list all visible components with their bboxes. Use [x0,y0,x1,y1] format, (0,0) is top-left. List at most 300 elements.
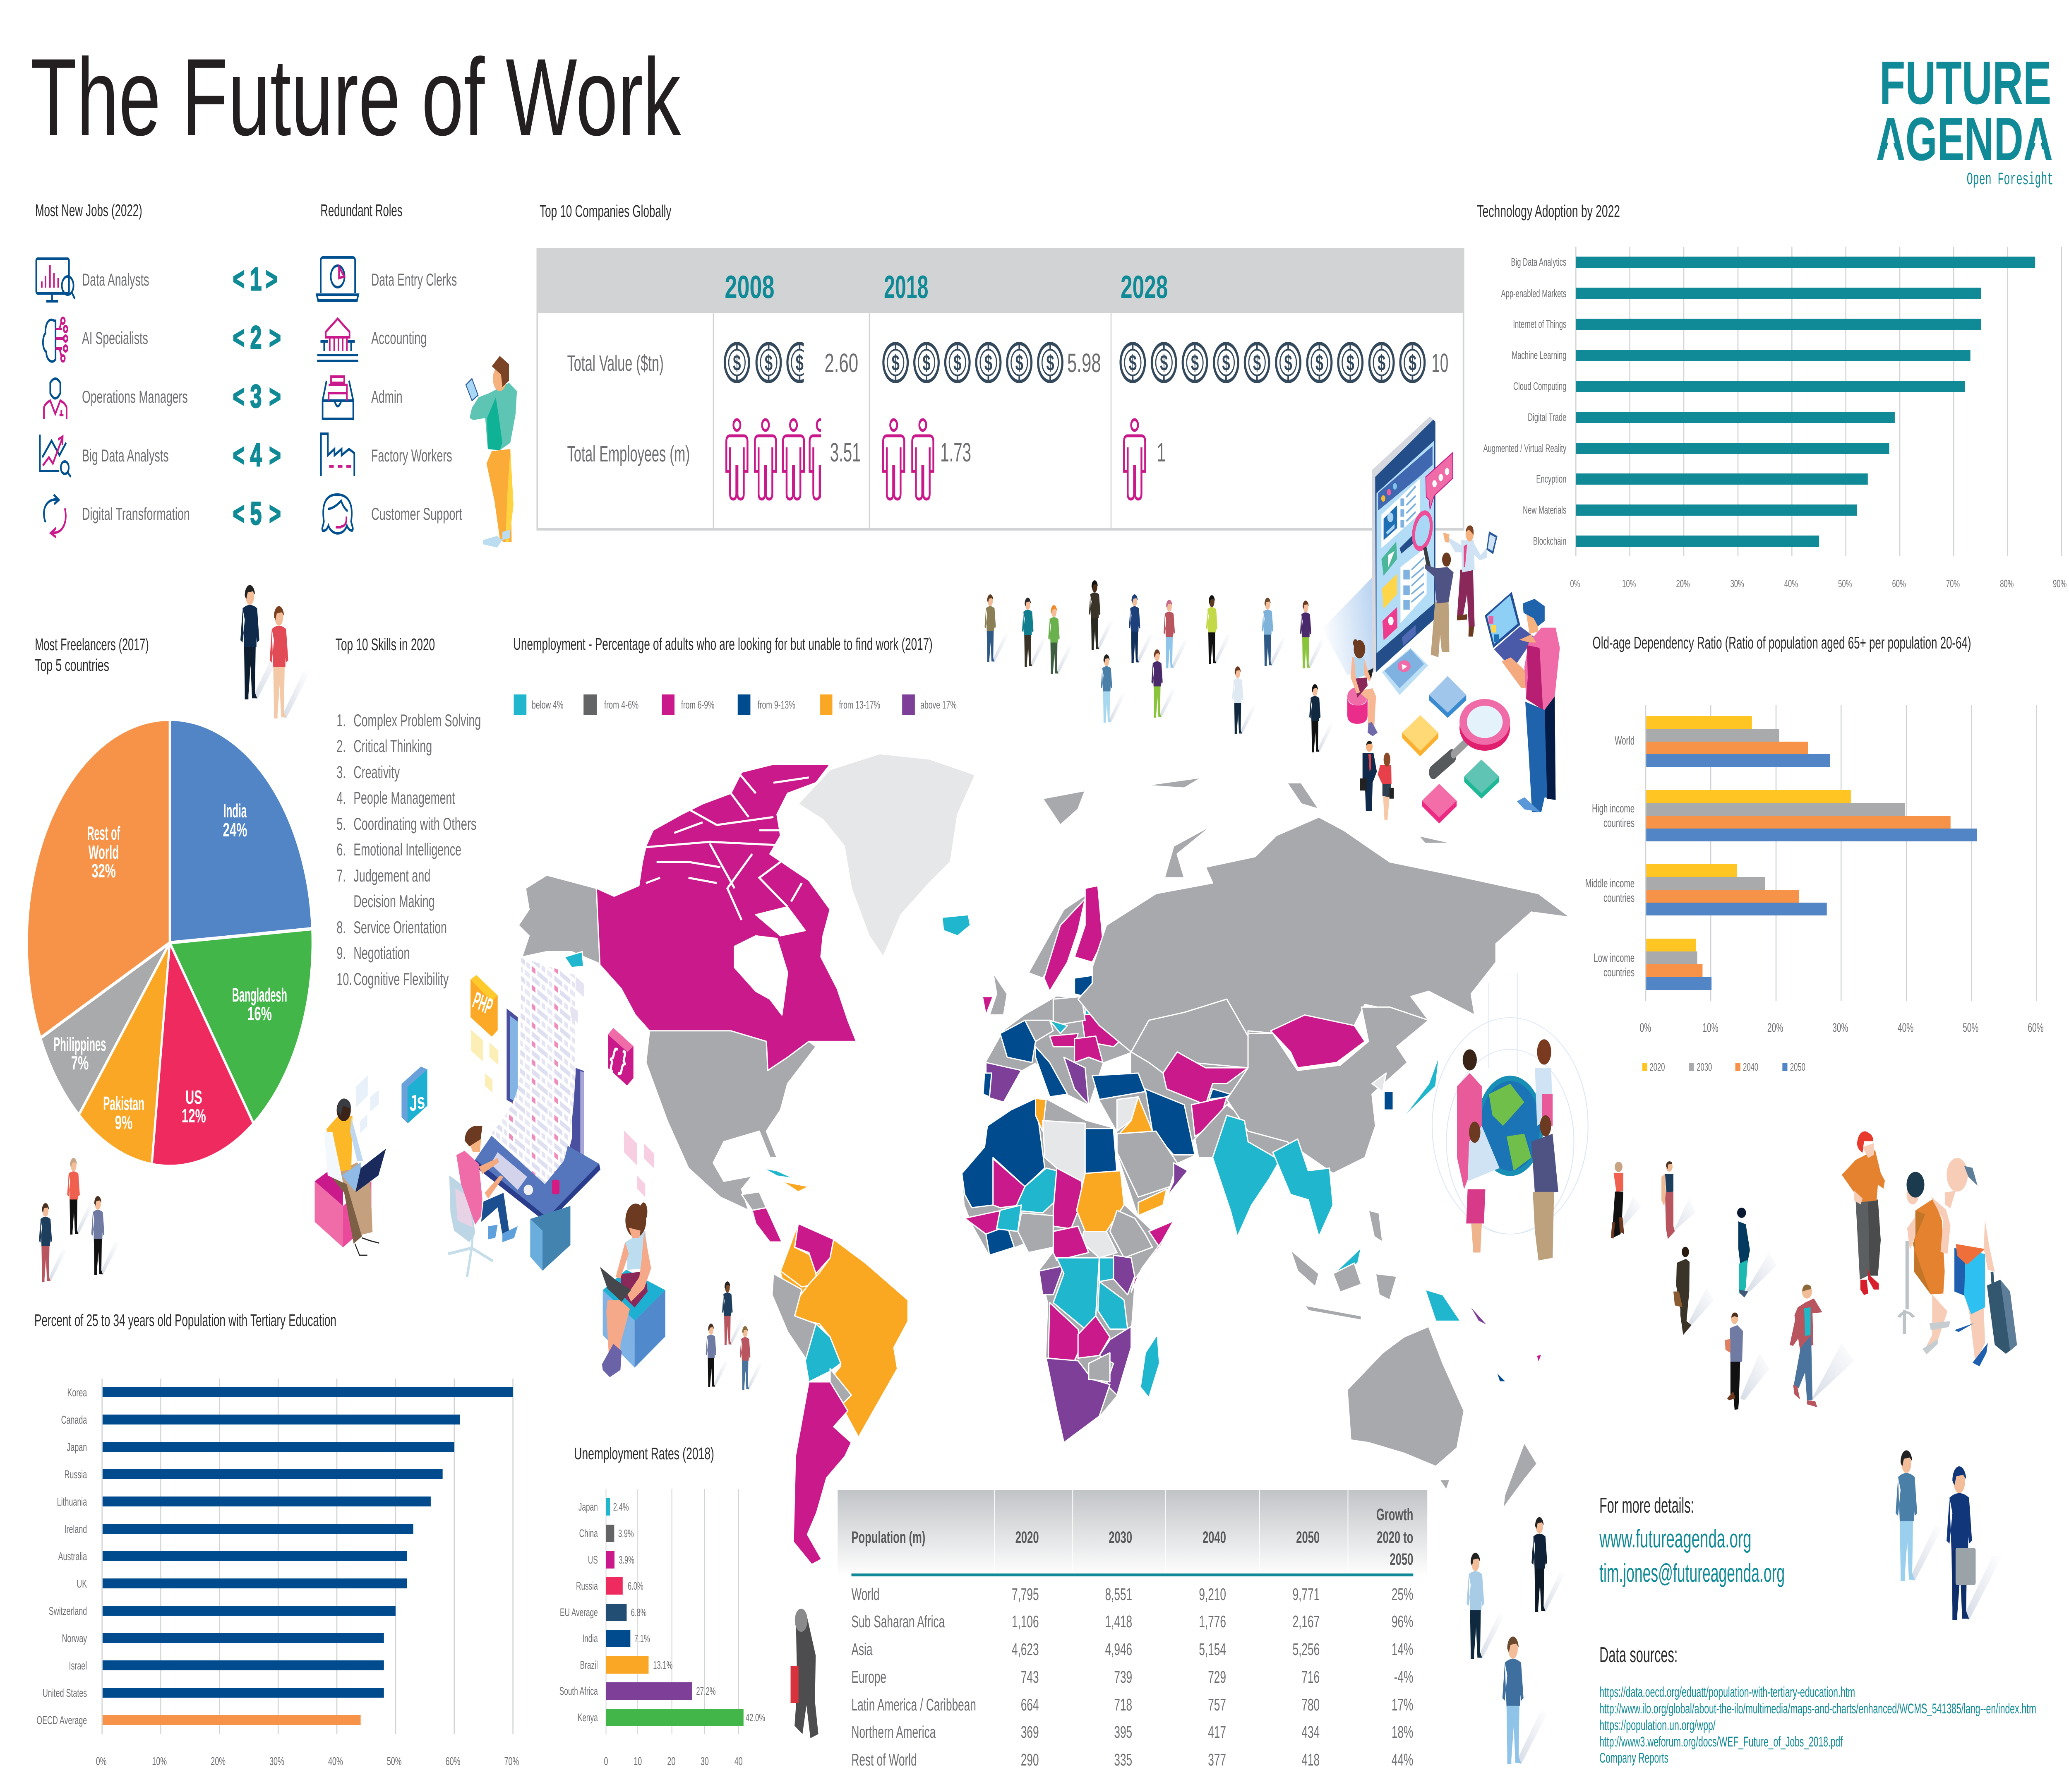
value labels: 3.9% [619,1554,634,1566]
category labels: Middle income [1585,877,1635,890]
category labels: Japan [578,1500,598,1513]
pie labels [53,800,287,1134]
rank column: 5 [250,495,262,531]
heading: Unemployment - Percentage of adults who are looking for but unable to find work (2017) [513,635,933,654]
for more details: For more details: [1599,1494,1694,1518]
category labels [1585,734,1635,979]
legend [514,694,957,715]
panel: contact details and sources [1599,1494,2036,1766]
legend: 2020 [1650,1061,1665,1073]
header text: Growth [1376,1506,1413,1524]
rank column: 1 [250,261,262,297]
header text: 2020 to [1377,1528,1413,1547]
axis labels: 60% [1892,577,1906,590]
illustration: coder, JS and PHP scene: Js [407,1089,427,1117]
table rows: 9,210 [1199,1585,1226,1604]
table rows: 4,946 [1105,1640,1132,1659]
heading: Most Freelancers (2017) [35,635,149,654]
rank column: > [269,320,281,356]
rank column: > [266,261,277,297]
heading: Technology Adoption by 2022 [1477,202,1620,221]
total value coins [725,344,1425,382]
figures: people beside population table [1467,1517,1566,1764]
axis labels: 60% [446,1755,461,1768]
value labels: 27.2% [696,1685,715,1697]
axis labels: 30 [701,1755,709,1768]
skills list: Judgement and [353,866,430,886]
skills list: People Management [353,788,455,808]
skills list: Critical Thinking [353,737,432,756]
table frame [537,249,1464,529]
rank column: < [233,320,245,356]
logo: Future Agenda: FUTURE [1879,49,2051,117]
category labels: Machine Learning [1512,349,1566,361]
category labels: countires [1603,817,1635,830]
panel: unemployment rates 2018 chart [559,1444,765,1768]
legend [1642,1061,1805,1073]
axis labels: 20% [1676,577,1690,590]
table rows: 335 [1114,1751,1132,1770]
year headers [725,269,1168,305]
website and email [1599,1525,1785,1588]
skills list: 5. [336,814,346,834]
axis labels [1640,1021,2044,1035]
table rows: 664 [1021,1696,1039,1715]
axis labels: 80% [2000,577,2014,590]
employee figures [726,420,1145,499]
skills list: 9. [336,944,346,963]
axis labels: 90% [2053,577,2067,590]
rank column: < [233,437,245,473]
table rows: 290 [1021,1751,1039,1770]
bars [606,1498,744,1726]
value labels: 3.9% [618,1527,634,1540]
category labels: UK [77,1577,87,1590]
illustration: app phone scene [1322,416,1560,824]
source links [1599,1684,2036,1766]
pie labels: US [185,1087,202,1108]
category labels: Digital Trade [1528,411,1566,423]
figure: central cluster of small people [984,580,1334,752]
icon: laptop [317,257,358,300]
values: 1 [1157,438,1166,467]
figures: camera woman and pilot [1896,1450,2002,1620]
category labels: Australia [58,1550,87,1563]
category labels: Canada [61,1413,87,1426]
source links: https://population.un.org/wpp/ [1599,1718,1716,1733]
role labels: Factory Workers [371,446,452,466]
axis labels: 50% [387,1755,402,1768]
axis labels [604,1755,743,1768]
axis labels: 10% [1622,577,1636,590]
role labels: Accounting [371,329,427,348]
value labels: 6.0% [628,1580,643,1592]
illustration: coder, JS and PHP scene [314,958,665,1377]
axis labels: 20% [1767,1021,1783,1035]
pie labels: 16% [247,1003,272,1025]
header text: 2050 [1390,1550,1413,1569]
heading: Top 10 Skills in 2020 [336,635,435,654]
rank column: 2 [250,319,262,356]
rank column: < [233,379,245,414]
category labels: Encyption [1536,473,1566,485]
heading [35,635,149,675]
header text: 2050 [1296,1528,1320,1547]
panel: redundant roles [317,201,517,548]
logo: Future Agenda: Open Foresight [1967,170,2053,190]
header text: 2030 [1109,1528,1132,1547]
category labels: countries [1603,966,1635,979]
axis labels: 50% [1838,577,1852,590]
table rows: 369 [1021,1723,1039,1742]
category labels: OECD Average [36,1714,87,1727]
header band [838,1490,1427,1576]
category labels: countries [1603,891,1635,905]
axis labels: 40 [734,1755,743,1768]
data sources heading: Data sources: [1599,1643,1678,1667]
value labels: 13.1% [653,1659,672,1671]
logo: Future Agenda [1876,49,2053,190]
values: 3.51 [830,438,861,467]
rank column: < [233,496,245,531]
table rows: Northern America [852,1723,936,1742]
heading: Unemployment Rates (2018) [574,1444,714,1463]
pie labels: 7% [71,1052,89,1074]
pie labels: 9% [115,1112,132,1134]
header text [852,1506,1413,1569]
role labels [371,270,462,524]
axis labels: 60% [2028,1021,2044,1035]
rank column: 3 [250,378,262,414]
gridlines [1576,247,2062,556]
pie labels: India [223,800,247,822]
table rows: 1,776 [1199,1612,1226,1631]
rank column: 4 [250,437,262,473]
category labels: Big Data Analytics [1511,256,1566,268]
job labels [82,270,190,524]
role labels: Customer Support [371,504,462,524]
skills list: Emotional Intelligence [353,840,461,860]
axis labels: 40% [1784,577,1798,590]
year headers: 2018 [884,269,928,305]
axis labels [1570,577,2067,590]
website and email: tim.jones@futureagenda.org [1599,1559,1785,1588]
logo: Future Agenda: AGENDA [1876,106,2053,173]
skills list: Negotiation [353,944,410,963]
header text: Population (m) [852,1528,925,1547]
source links: https://data.oecd.org/eduatt/population-with-tertiary-education.htm [1599,1684,1855,1700]
axis labels: 40% [328,1755,343,1768]
gridlines [606,1489,739,1734]
skills list: Coordinating with Others [353,814,476,834]
figure: business pair near pie chart [240,585,310,718]
category labels: Augmented / Virtual Reality [1483,442,1566,454]
category labels: Internet of Things [1513,318,1566,330]
rank column: > [269,437,281,473]
table rows: -4% [1394,1668,1413,1687]
category labels: South Africa [559,1684,598,1697]
icon: admin tray [323,377,353,419]
category labels: China [579,1527,598,1540]
skills list: Service Orientation [353,918,447,937]
rank column: < [233,261,245,297]
job labels: Operations Managers [82,387,188,407]
table rows: 716 [1301,1668,1320,1687]
table rows: Asia [852,1640,873,1659]
pie labels: World [89,842,119,863]
icon: factory [321,434,354,476]
table rows: Rest of World [852,1751,917,1770]
source links: Company Reports [1599,1750,1668,1766]
icon: operations manager [44,379,67,419]
website and email: www.futureagenda.org [1599,1525,1752,1553]
legend: above 17% [920,698,957,711]
map heading and legend [513,635,957,715]
heading: Old-age Dependency Ratio (Ratio of population aged 65+ per population 20-64) [1593,634,1971,653]
category labels: Low income [1594,951,1635,965]
pie labels: Philippines [53,1034,106,1055]
table rows: 17% [1392,1696,1413,1715]
skills list: 10. [336,970,352,989]
axis labels: 70% [504,1755,519,1768]
icon: customer support [322,495,353,533]
category labels [36,1386,87,1727]
value labels [613,1501,765,1724]
category labels: World [1615,734,1635,747]
heading: Top 10 Companies Globally [540,202,672,221]
table rows: 729 [1208,1668,1226,1687]
skills list: 7. [336,866,346,886]
icon: big data analysis [40,435,71,477]
header text: 2040 [1203,1528,1226,1547]
category labels: Russia [576,1579,598,1592]
category labels: Cloud Computing [1513,380,1566,392]
legend: from 9-13% [758,698,795,711]
skills list: Complex Problem Solving [353,711,481,730]
role labels: Data Entry Clerks [371,270,457,290]
person: man with phone in teal sweater [466,356,517,548]
category labels: US [588,1553,598,1566]
category labels: Ireland [65,1523,87,1535]
row labels [567,351,690,466]
axis labels: 0% [1640,1021,1651,1035]
values: 5.98 [1067,348,1101,378]
value labels: 42.0% [746,1711,765,1724]
table rows: 4,623 [1012,1640,1039,1659]
pie labels: Bangladesh [232,985,287,1006]
axis labels: 30% [1832,1021,1848,1035]
values [824,348,1448,467]
category labels: EU Average [560,1606,598,1619]
legend: from 4-6% [604,698,638,711]
source links: http://www3.weforum.org/docs/WEF_Future_of_Jobs_2018.pdf [1599,1734,1843,1750]
illustration: coder, JS and PHP scene: PHP [470,987,496,1021]
figure: three people beside South America [706,1281,763,1390]
header text: 2020 [1015,1528,1039,1547]
table rows: 2,167 [1293,1612,1320,1631]
bars [103,1387,513,1725]
pie labels: 32% [91,860,116,882]
table rows: 780 [1301,1696,1320,1715]
table rows: 8,551 [1105,1585,1132,1604]
gridlines [102,1379,513,1734]
category labels [1483,256,1566,547]
heading: Percent of 25 to 34 years old Population with Tertiary Education [34,1311,336,1330]
skills list: Cognitive Flexibility [353,970,449,989]
table rows: 718 [1114,1696,1132,1715]
category labels: High income [1592,802,1635,815]
table rows [852,1585,1413,1770]
job labels: Data Analysts [82,270,149,290]
illustration: coder, JS and PHP scene: { } [607,1042,630,1077]
figure: man in grey coat with red bag [791,1609,818,1738]
skills list: 2. [336,737,346,756]
skills list: Decision Making [353,892,434,911]
rank column: > [269,379,281,414]
pie labels: Pakistan [103,1093,144,1115]
skills list: 8. [336,918,346,937]
table rows: 44% [1392,1751,1413,1770]
pie labels: 12% [182,1105,206,1127]
title: The Future of Work [30,36,681,159]
table rows: Latin America / Caribbean [852,1696,976,1715]
axis labels: 50% [1963,1021,1978,1035]
values: 1.73 [940,438,971,467]
values: 10 [1431,348,1448,378]
table rows: 96% [1392,1612,1413,1631]
axis labels: 30% [1730,577,1744,590]
skills list: 4. [336,788,346,808]
category labels: Switzerland [49,1605,87,1617]
legend: from 13-17% [839,698,880,711]
icon: AI brain [43,318,67,362]
category labels: Brazil [580,1658,598,1671]
axis labels: 10% [1702,1021,1719,1035]
axis labels: 10% [152,1755,167,1768]
skills list: 1. [336,711,346,730]
table rows: Europe [852,1668,886,1687]
table rows: 18% [1392,1723,1413,1742]
axis labels: 30% [269,1755,284,1768]
legend: 2040 [1743,1061,1758,1073]
table rows: Sub Saharan Africa [852,1612,945,1631]
table rows: 395 [1114,1723,1132,1742]
value labels: 2.4% [613,1501,629,1513]
category labels: Japan [67,1441,87,1453]
panel: tertiary education chart [34,1311,519,1768]
category labels: Korea [67,1386,87,1399]
panel: technology adoption chart [1477,202,2067,590]
legend: from 6-9% [681,698,715,711]
row labels: Total Employees (m) [567,441,690,466]
value labels: 6.8% [631,1606,646,1619]
axis labels: 70% [1946,577,1960,590]
table rows: 14% [1392,1640,1413,1659]
row labels: Total Value ($tn) [567,351,664,376]
table rows: 5,256 [1293,1640,1320,1659]
role labels: Admin [371,387,403,407]
illustration: globe with four people [1432,973,1588,1261]
skills list [336,711,481,989]
year headers: 2028 [1121,269,1168,305]
skills list: 6. [336,840,346,860]
category labels: Russia [65,1468,87,1481]
legend: 2030 [1697,1061,1712,1073]
table rows: 7,795 [1012,1585,1039,1604]
illustration: right-hand people and travellers [1611,1131,2017,1410]
category labels: India [582,1632,598,1645]
panel: top 10 companies table [537,202,1464,529]
category labels: Blockchain [1533,535,1566,547]
panel: freelancers pie chart [27,635,312,1166]
pie labels: Rest of [87,823,120,844]
category labels: Lithuania [57,1495,87,1508]
panel: population table [838,1490,1427,1770]
table rows: World [852,1585,879,1604]
axis labels: 0 [604,1755,608,1768]
year headers: 2008 [725,269,775,305]
skills list: 3. [336,763,346,782]
job labels: Digital Transformation [82,504,190,524]
source links: http://www.ilo.org/global/about-the-ilo/multimedia/maps-and-charts/enhanced/WCMS_541385/lang--en/index.htm [1599,1701,2036,1717]
category labels: New Materials [1523,504,1566,516]
icon: bank [317,319,358,361]
table rows: 377 [1208,1751,1226,1770]
table rows: 5,154 [1199,1640,1226,1659]
skills list: Creativity [353,763,400,782]
legend: 2050 [1790,1061,1805,1073]
world map: unemployment by country [518,754,1570,1564]
panel: top 10 skills [336,635,481,989]
category labels: Israel [69,1659,87,1672]
table rows: 743 [1021,1668,1039,1687]
heading: Top 5 countries [35,656,109,675]
axis labels: 0% [1570,577,1580,590]
axis labels [96,1755,519,1768]
pie slices [27,719,312,1166]
rank column [233,261,281,531]
values: 2.60 [824,348,858,378]
panel: old-age dependency chart [1585,634,2044,1073]
category labels: Kenya [578,1711,598,1724]
icon: data analysts [36,259,75,301]
table rows: 434 [1301,1723,1320,1742]
axis labels: 10 [634,1755,642,1768]
category labels: United States [43,1686,87,1699]
category labels: Norway [62,1632,87,1645]
heading: Redundant Roles [320,201,403,220]
icon: digital transformation [44,495,66,537]
heading: Most New Jobs (2022) [35,201,142,220]
axis labels: 40% [1898,1021,1913,1035]
category labels [559,1500,598,1724]
legend: below 4% [532,698,564,711]
pie labels: 24% [223,819,247,841]
table rows: 9,771 [1293,1585,1320,1604]
table rows: 1,106 [1012,1612,1039,1631]
panel: most new jobs [35,201,190,537]
table rows: 417 [1208,1723,1226,1742]
bars [1576,257,2035,547]
value labels: 7.1% [634,1632,650,1645]
table rows: 25% [1392,1585,1413,1604]
table rows: 739 [1114,1668,1132,1687]
job labels: AI Specialists [82,329,148,348]
job labels: Big Data Analysts [82,446,169,466]
rank column: > [269,496,281,531]
bars [1646,716,1977,990]
category labels: App-enabled Markets [1501,287,1566,300]
